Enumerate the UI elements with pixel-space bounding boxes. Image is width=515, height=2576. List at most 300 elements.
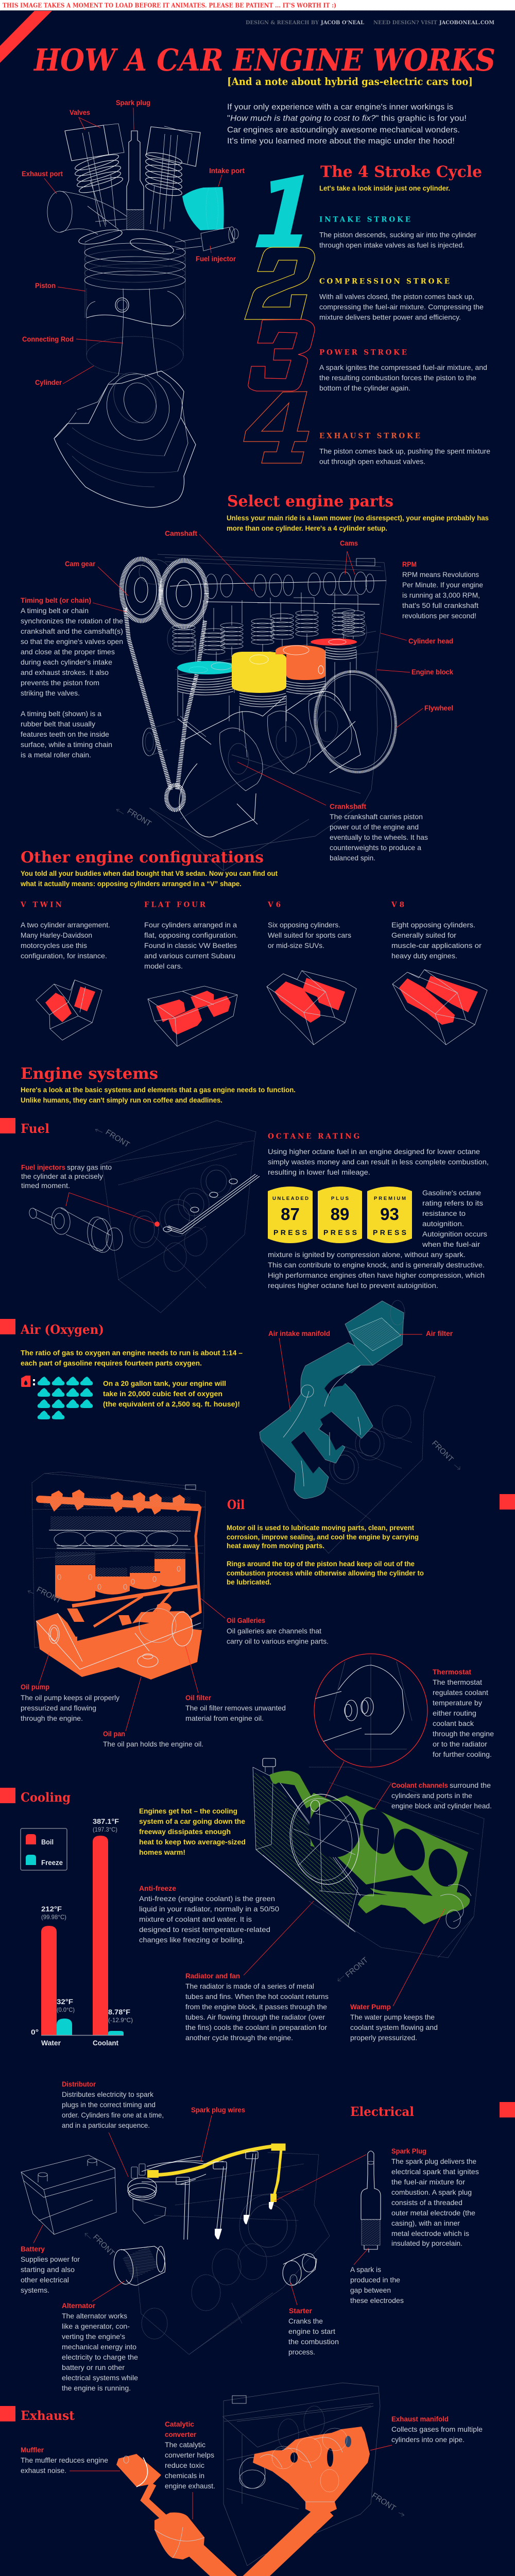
section: select engine parts intro [227, 493, 489, 532]
chart legend [21, 1828, 67, 1870]
text: anti-freeze: mixture of coolant and water. It is [139, 1915, 252, 1923]
numeral 3 [248, 319, 315, 391]
fan [283, 1789, 366, 1890]
badge: 87: 87 [281, 1205, 300, 1224]
text: muffler [21, 2446, 120, 2475]
heading: Fuel [21, 1121, 49, 1136]
compression stroke: compressing the fuel-air mixture. Compressing the [319, 302, 484, 311]
section: exhaust [0, 2383, 483, 2576]
text: timing belt: is a metal roller chain. [21, 751, 91, 759]
compression stroke [319, 278, 484, 321]
section: other engine configurations: what it actually means: opposing cylinders arranged in a “V” shape. [20, 879, 242, 888]
section: air [0, 1300, 460, 1553]
text: thermostat: or to the radiator [433, 1740, 487, 1748]
power stroke: bottom of the cylinder again. [319, 384, 410, 392]
section: engine systems intro: Here's a look at the basic systems and elements that a gas engine needs to function. [21, 1086, 296, 1094]
text: battery [21, 2225, 80, 2294]
numeral 4 [244, 392, 309, 463]
text: crankshaft: Crankshaft [330, 802, 366, 810]
column: flat four [144, 901, 238, 1046]
text: radiator and fan: tubes and fins. When the hot coolant returns [185, 1992, 329, 2001]
fuel rail and injectors [163, 1174, 260, 1234]
callout: fuel injectors: spray gas into [67, 1163, 112, 1172]
text: timing belt: so that the engine's valves open [21, 637, 123, 646]
section marker [500, 2102, 515, 2117]
badge: 89: 89 [331, 1205, 349, 1224]
label: exhaust port: Exhaust port [22, 170, 63, 178]
label: valves [70, 108, 100, 130]
numeral 2 [245, 247, 315, 319]
icon: connecting rod and crankshaft [54, 289, 196, 507]
column: V6: Six opposing cylinders. [268, 921, 340, 929]
label: spark plug wires: Spark plug wires [191, 2106, 245, 2114]
text: oil filter: material from engine oil. [185, 1714, 264, 1722]
bar chart: boil and freeze points: Coolant [93, 2039, 118, 2047]
text: 20 gallon: (the equivalent of a 2,500 sq. ft. house)! [103, 1400, 240, 1408]
text: spark gap: A spark is [350, 2265, 381, 2274]
design credit: JACOBONEAL.COM [439, 20, 494, 26]
column: V6: Well suited for sports cars [268, 931, 351, 939]
text: thermostat: Thermostat [433, 1668, 471, 1676]
intake manifold [260, 1343, 373, 1499]
radiator [253, 1772, 355, 1927]
text: timing belt: A timing belt (shown) is a [21, 709, 101, 718]
text: anti-freeze: Anti-freeze (engine coolant) is the green [139, 1894, 275, 1903]
column: V twin: motorcycles use this [21, 941, 87, 950]
text: starter: Cranks the [288, 2317, 323, 2325]
text: timing belt: A timing belt or chain [21, 606, 89, 615]
text: thermostat: temperature by [433, 1699, 482, 1707]
crank and oil pan [36, 1611, 202, 1680]
text: motor oil [227, 1523, 424, 1586]
text: catalytic converter: Catalytic [165, 2420, 194, 2428]
text: motor oil: Motor oil is used to lubricate moving parts, clean, prevent [227, 1523, 414, 1532]
ghost engine [260, 1364, 435, 1553]
icon: fuel injector [175, 227, 238, 251]
red corner stripe [0, 11, 52, 63]
callout: fuel injectors: Fuel injectors [21, 1163, 65, 1172]
bar chart: boil and freeze points: Water [41, 2039, 61, 2047]
intro text: If your only experience with a car engine's inner workings is [227, 103, 453, 111]
text: 20 gallon [103, 1379, 240, 1408]
subtitle: [And a note about hybrid gas-electric cars too] [227, 75, 473, 88]
column: V twin: configuration, for instance. [21, 952, 107, 960]
label: spark plug wires [191, 2106, 245, 2161]
text: muffler: The muffler reduces engine [21, 2456, 108, 2464]
text: oil galleries: Oil Galleries [227, 1616, 265, 1624]
section marker [0, 1788, 15, 1803]
spark plug enlarged [361, 2151, 381, 2252]
chart legend: Freeze [41, 1858, 63, 1867]
bar chart: boil and freeze points [31, 1817, 133, 2047]
text: distributor: order. Cylinders fire one at a time, [62, 2111, 164, 2119]
text: RPM: that's 50 full crankshaft [402, 601, 478, 609]
text: timing belt: during each cylinder's intake [21, 658, 112, 666]
icon: flat four diagram [148, 986, 237, 1046]
text: spark plug: casing), with an inner [391, 2219, 460, 2227]
text: oil filter: The oil filter removes unwanted [185, 1704, 286, 1712]
text: alternator: verting the engine's [62, 2332, 125, 2341]
exhaust illustration [116, 2383, 404, 2576]
column: V8: Eight opposing cylinders. [391, 921, 475, 929]
text: catalytic converter: reduce toxic [165, 2461, 204, 2469]
text: crankshaft: The crankshaft carries piston [330, 812, 423, 821]
text: ratio: each part of gasoline requires fourteen parts oxygen. [21, 1359, 202, 1367]
icon: valve lifters and springs [65, 124, 200, 232]
text: water pump [350, 1908, 445, 2042]
text: oil filter [185, 1646, 286, 1722]
icon: exhaust port [47, 191, 127, 234]
text: motor oil: corrosion, improve sealing, and cool the engine by carrying [227, 1533, 419, 1541]
design credit: NEED DESIGN? VISIT [373, 20, 438, 26]
bar chart: boil and freeze points: 32°F [57, 1997, 73, 2006]
fuel system ghost engine [102, 1121, 256, 1313]
section marker [0, 1118, 15, 1133]
text: spark plug: metal electrode which is [391, 2229, 469, 2238]
front marker: FRONT [126, 807, 153, 828]
badge: 87: PRESS [273, 1228, 307, 1236]
section: engine systems intro: Unlike humans, they can't simply run on coffee and deadlines. [21, 1096, 222, 1104]
icon: V6 diagram [267, 971, 356, 1045]
heading: The 4 Stroke Cycle [320, 163, 482, 181]
octane rating: OCTANE RATING [268, 1132, 359, 1141]
text: 20 gallon: On a 20 gallon tank, your engine will [103, 1379, 226, 1387]
column: V twin [20, 901, 110, 1040]
column: flat four: flat, opposing configuration. [144, 931, 238, 939]
callout: fuel injectors: timed moment. [21, 1181, 70, 1190]
section: other engine configurations: You told all your buddies when dad bought that V8 sedan. Now you can find out [21, 869, 278, 877]
valve train [50, 1516, 191, 1531]
section: other engine configurations: Other engine configurations [21, 849, 264, 867]
label: engine block [377, 668, 453, 676]
section: electrical [21, 2080, 515, 2392]
text: spark plug: insulated by porcelain. [391, 2239, 462, 2247]
badge: 93: PREMIUM [374, 1196, 406, 1201]
text: spark plug [274, 2147, 479, 2247]
bar chart: boil and freeze points: 8.78°F [108, 2008, 130, 2016]
text: timing belt: and close at the proper times [21, 648, 115, 656]
piston rings [55, 1552, 185, 1577]
octane rating: resulting in lower fuel mileage. [268, 1168, 370, 1176]
text: distributor [62, 2080, 164, 2177]
text: catalytic converter: The catalytic [165, 2441, 205, 2449]
text: alternator: battery or run other [62, 2363, 125, 2371]
column: V6 [267, 901, 356, 1045]
section marker [0, 2406, 15, 2421]
label: connecting rod [22, 335, 123, 343]
front marker: FRONT [35, 1585, 63, 1605]
text: catalytic converter: chemicals in [165, 2471, 204, 2480]
bar chart: boil and freeze points: (99.98°C) [41, 1913, 66, 1921]
text: battery: other electrical [21, 2276, 69, 2284]
subheading: Let's take a look inside just one cylinder. [319, 184, 450, 192]
icon: intake port [182, 187, 224, 230]
text: distributor: Distributes electricity to spark [62, 2090, 154, 2098]
exhaust pipe [193, 2509, 327, 2576]
crankshaft [143, 691, 360, 837]
catalytic converter [154, 2513, 204, 2560]
text: timing belt: Timing belt (or chain) [21, 596, 91, 604]
valve springs [167, 592, 367, 670]
column: V6: V6 [267, 901, 281, 909]
camshaft oil band [40, 1489, 197, 1515]
label: cam gear: Cam gear [65, 560, 96, 568]
text: battery: Battery [21, 2245, 45, 2253]
compression stroke: COMPRESSION STROKE [319, 278, 450, 286]
column: V8: Generally suited for [391, 931, 456, 939]
intro text [227, 103, 467, 146]
label: air intake manifold [268, 1329, 330, 1412]
octane explanation: autoignition. [422, 1219, 464, 1228]
front marker: FRONT [344, 1956, 370, 1979]
octane explanation: mixture is ignited by compression alone, without any spark. [268, 1250, 466, 1259]
text: radiator and fan [185, 1901, 329, 2042]
power stroke: the resulting combustion forces the piston to the [319, 374, 476, 382]
column: V8: V8 [391, 901, 404, 909]
label: cylinder head: Cylinder head [408, 637, 453, 645]
exhaust stroke [319, 432, 490, 465]
text: alternator [62, 2281, 138, 2392]
heading: Oil [227, 1497, 245, 1512]
text: engines get hot: freeway dissipates enough [139, 1827, 231, 1836]
text: timing belt: striking the valves. [21, 689, 80, 697]
text: oil pan: The oil pan holds the engine oil. [103, 1740, 203, 1748]
text: alternator: electrical systems while [62, 2374, 138, 2382]
cam gears [122, 559, 207, 626]
section marker [0, 1319, 15, 1334]
compression stroke: mixture delivers better power and efficiency. [319, 313, 461, 321]
badge: 89 [318, 1187, 362, 1243]
section: other engine configurations [20, 849, 487, 1046]
text: distributor: and in a particular sequence. [62, 2121, 150, 2129]
text: RPM [402, 560, 483, 620]
text: oil pump: Oil pump [21, 1683, 49, 1691]
label: fuel injector: Fuel injector [196, 255, 236, 263]
starter [283, 2253, 317, 2285]
text: engines get hot: heat to keep two average-sized [139, 1838, 246, 1846]
column: V6: or mid-size SUVs. [268, 941, 324, 950]
text: oil pump [21, 1652, 119, 1722]
octane explanation: rating refers to its [422, 1199, 483, 1207]
badge: 89: PRESS [323, 1228, 357, 1236]
intake stroke: INTAKE STROKE [319, 216, 410, 224]
octane explanation: Autoignition occurs [422, 1230, 487, 1238]
text: timing belt [21, 596, 127, 759]
section: oil [21, 1472, 515, 1748]
distributor [142, 2156, 206, 2182]
heading: Electrical [350, 2104, 414, 2119]
intake stroke [319, 216, 476, 249]
text: oil filter: Oil filter [185, 1693, 212, 1702]
heading: Exhaust [21, 2408, 75, 2423]
front marker: FRONT [104, 1128, 131, 1149]
text: spark gap: these electrodes [350, 2296, 404, 2304]
text: anti-freeze [139, 1884, 279, 1944]
text: engines get hot [139, 1807, 246, 1856]
air filter housing [345, 1301, 404, 1365]
text: water pump: The water pump keeps the [350, 2013, 435, 2021]
text: alternator: The alternator works [62, 2312, 127, 2320]
text: anti-freeze: designed to resist temperature-related [139, 1925, 270, 1934]
front marker: FRONT [91, 2233, 116, 2258]
text: RPM: Per Minute. If your engine [402, 581, 483, 589]
piston: orange [276, 645, 325, 732]
air intake illustration [260, 1300, 460, 1553]
text: motor oil: Rings around the top of the piston head keep oil out of the [227, 1560, 415, 1568]
intake stroke: The piston descends, sucking air into the cylinder [319, 230, 476, 239]
octane explanation: This can contribute to engine knock, and is generally destructive. [268, 1261, 485, 1269]
muffler pipe [145, 2484, 164, 2518]
octane rating [268, 1132, 489, 1290]
thermostat magnifier [314, 1654, 427, 1798]
icon: V8 diagram [392, 970, 487, 1045]
text: oil pump: through the engine. [21, 1714, 83, 1722]
heading: Air (Oxygen) [20, 1322, 104, 1337]
text: thermostat: coolant back [433, 1719, 474, 1727]
fuel injector enlarged [28, 1207, 123, 1253]
column: flat four: FLAT FOUR [144, 901, 206, 909]
section: engine systems intro [21, 1065, 296, 1104]
label: exhaust port [22, 170, 63, 194]
text: timing belt: surface, while a timing chain [21, 740, 112, 749]
text: exhaust manifold: Collects gases from multiple [391, 2425, 483, 2433]
text: muffler: exhaust noise. [21, 2466, 66, 2475]
text: spark gap: gap between [350, 2286, 391, 2294]
power stroke: A spark ignites the compressed fuel-air mixture, and [319, 363, 487, 371]
text: RPM: RPM means Revolutions [402, 570, 479, 579]
text: starter: the combustion [288, 2337, 339, 2346]
text: ratio: The ratio of gas to oxygen an engine needs to run is about 1:14 – [21, 1349, 243, 1357]
label: spark plug [116, 98, 150, 130]
text: water pump: properly pressurized. [350, 2033, 417, 2042]
text: coolant channels: engine block and cylinder head. [391, 1802, 492, 1810]
column: flat four: Found in classic VW Beetles [144, 941, 237, 950]
text: spark gap [350, 2248, 404, 2304]
label: intake port [209, 166, 245, 187]
section: select engine parts intro: Select engine parts [227, 493, 393, 511]
text: motor oil: be lubricated. [227, 1578, 271, 1586]
column: V twin: A two cylinder arrangement. [21, 921, 110, 929]
label: spark plug: Spark plug [116, 98, 150, 107]
label: air filter [399, 1329, 453, 1337]
text: oil pump: The oil pump keeps oil properly [21, 1693, 119, 1702]
text: thermostat [433, 1668, 494, 1758]
label: engine block: Engine block [411, 668, 453, 676]
label: intake port: Intake port [209, 166, 245, 175]
label: air intake manifold: Air intake manifold [268, 1329, 330, 1337]
text: timing belt: prevents the piston from [21, 679, 99, 687]
label: cam gear [65, 560, 128, 596]
text: thermostat: The thermostat [433, 1678, 482, 1686]
pistons [55, 1559, 185, 1601]
text: spark plug: electrical spark that ignites [391, 2167, 479, 2176]
label: cylinder: Cylinder [35, 378, 62, 386]
text: coolant channels: surround the [450, 1781, 491, 1789]
text: exhaust manifold [370, 2415, 483, 2450]
text: spark plug: the fuel-air mixture for [391, 2178, 465, 2186]
four cylinder engine wireframe [116, 554, 402, 871]
front marker: FRONT [370, 2491, 397, 2513]
text: alternator: the engine is running. [62, 2384, 131, 2392]
text: oil pump: pressurized and flowing [21, 1704, 96, 1712]
compression stroke: With all valves closed, the piston comes back up, [319, 292, 474, 300]
text: distributor: Distributor [62, 2080, 96, 2088]
cylinder part labels [22, 98, 245, 386]
ghost engine [136, 2153, 330, 2354]
label: cylinder head [381, 633, 453, 645]
text: spark plug: consists of a threaded [391, 2198, 462, 2207]
section: cooling [0, 1654, 494, 2047]
bar chart: boil and freeze points: 387.1°F [93, 1817, 119, 1825]
text: battery: systems. [21, 2286, 49, 2294]
timing belt [125, 608, 205, 810]
block outline [149, 554, 386, 871]
text: catalytic converter [165, 2420, 215, 2519]
intro text: "How much is that going to cost to fix? " this graphic is for you! [227, 114, 467, 123]
badge: 87: UNLEADED [272, 1196, 308, 1201]
text: RPM: RPM [402, 560, 417, 568]
text: alternator: Alternator [62, 2301, 96, 2310]
text: exhaust manifold: Exhaust manifold [391, 2415, 449, 2423]
text: radiator and fan: from the engine block, it passes through the [185, 2003, 327, 2011]
icon: valve heads and piston [78, 227, 185, 326]
front marker [370, 2491, 404, 2516]
bar chart: boil and freeze points: (0.0°C) [57, 2006, 75, 2013]
column: V twin: V TWIN [20, 901, 62, 909]
exhaust stroke: out through open exhaust valves. [319, 457, 425, 465]
text: spark plug: Spark Plug [391, 2147, 426, 2155]
power stroke [319, 349, 487, 392]
text: timing belt: crankshaft and the camshaft(s) [21, 627, 123, 635]
label: piston: Piston [35, 281, 56, 290]
column: V twin: Many Harley-Davidson [21, 931, 92, 939]
label: fuel injector [196, 246, 236, 263]
octane explanation: resistance to [422, 1209, 466, 1217]
oil system illustration [28, 1472, 205, 1680]
bar chart: boil and freeze points: 0° [31, 2028, 39, 2036]
octane explanation: requires higher octane fuel to prevent autoignition. [268, 1281, 438, 1290]
intake stroke: through open intake valves as fuel is injected. [319, 241, 465, 249]
cylinder cut-outs [309, 1801, 462, 1896]
octane explanation: when the fuel-air [422, 1240, 480, 1248]
text: engines get hot: system of a car going down the [139, 1817, 245, 1825]
text: water pump: coolant system flowing and [350, 2023, 438, 2031]
badge: 93: PRESS [373, 1228, 406, 1236]
label: connecting rod: Connecting Rod [22, 335, 74, 343]
section: select engine parts intro: Unless your main ride is a lawn mower (no disrespect), your engine probably has [227, 514, 489, 522]
octane explanation [268, 1189, 487, 1290]
text: catalytic converter: engine exhaust. [165, 2482, 215, 2490]
oil galleries [72, 1506, 200, 1626]
text: 20 gallon: take in 20,000 cubic feet of oxygen [103, 1389, 222, 1398]
power stroke: POWER STROKE [319, 349, 407, 357]
icon: oxygen drops [38, 1377, 93, 1419]
front marker [430, 1439, 460, 1469]
icon: gas can ratio [21, 1376, 35, 1387]
section: 4 stroke cycle [319, 163, 490, 465]
text: alternator: like a generator, con- [62, 2322, 130, 2330]
text: starter [288, 2283, 339, 2356]
text: radiator and fan: Radiator and fan [185, 1972, 240, 1980]
label: flywheel: Flywheel [424, 704, 453, 712]
top notice banner [0, 0, 515, 10]
label: camshaft: Camshaft [165, 529, 197, 537]
engine part labels [21, 529, 483, 862]
text: engines get hot: Engines get hot – the cooling [139, 1807, 237, 1815]
badge: 89: PLUS [331, 1196, 349, 1201]
intro text: It's time you learned more about the magic under the hood! [227, 137, 455, 146]
chart legend: Boil [41, 1838, 54, 1846]
